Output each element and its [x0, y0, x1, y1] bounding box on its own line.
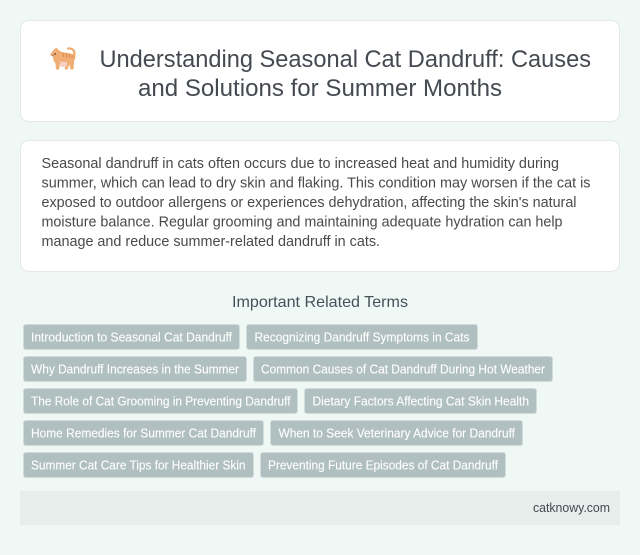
- tag: [254, 356, 552, 382]
- tag: [270, 420, 522, 446]
- footer: site name: catknowy.com: [533, 500, 610, 515]
- tail: [68, 48, 74, 59]
- panel: description card: [20, 140, 620, 272]
- tag: The Role of Cat Grooming in Preventing Dandruff: [31, 394, 291, 408]
- tag: [24, 388, 298, 414]
- tag: [304, 388, 536, 414]
- tag: [24, 324, 240, 350]
- tag: [24, 420, 264, 446]
- panel: related term tags: [24, 324, 552, 478]
- text block: description: [42, 156, 590, 250]
- face: [54, 53, 56, 55]
- tag: Recognizing Dandruff Symptoms in Cats: [254, 330, 470, 344]
- tag: [24, 452, 254, 478]
- body and legs: [50, 48, 74, 70]
- tag: [24, 356, 246, 382]
- heading: title line 2: and Solutions for Summer Months: [138, 75, 502, 102]
- text block: description: Seasonal dandruff in cats often occurs due to increased heat and humidity during: [42, 156, 559, 172]
- tag: [246, 324, 478, 350]
- tag: Introduction to Seasonal Cat Dandruff: [31, 330, 232, 344]
- text block: description: moisture balance. Regular grooming and maintaining adequate hydration can help: [42, 214, 562, 230]
- tag: Home Remedies for Summer Cat Dandruff: [31, 426, 256, 440]
- tag: Common Causes of Cat Dandruff During Hot Weather: [261, 362, 546, 376]
- belly: [60, 62, 67, 67]
- tag: [260, 452, 506, 478]
- heading: important related terms: Important Related Terms: [232, 294, 408, 311]
- tag: Summer Cat Care Tips for Healthier Skin: [31, 458, 246, 472]
- tag: Dietary Factors Affecting Cat Skin Health: [312, 394, 529, 408]
- text block: description: exposed to outdoor allergens or experiences dehydration, affecting the skin's natural: [42, 195, 576, 211]
- text block: description: summer, which can lead to dry skin and flaking. This condition may worsen if the cat is: [42, 176, 590, 192]
- icon: cat: [50, 48, 74, 70]
- stripes: [63, 53, 72, 58]
- heading: title line 1: Understanding Seasonal Cat Dandruff: Causes: [100, 46, 591, 73]
- text block: description: manage and reduce summer-related dandruff in cats.: [42, 234, 380, 250]
- tag: Preventing Future Episodes of Cat Dandruff: [268, 458, 498, 472]
- panel: title card: [20, 20, 620, 122]
- footer: [20, 491, 620, 525]
- tag: When to Seek Veterinary Advice for Dandruff: [278, 426, 515, 440]
- tag: Why Dandruff Increases in the Summer: [31, 362, 240, 376]
